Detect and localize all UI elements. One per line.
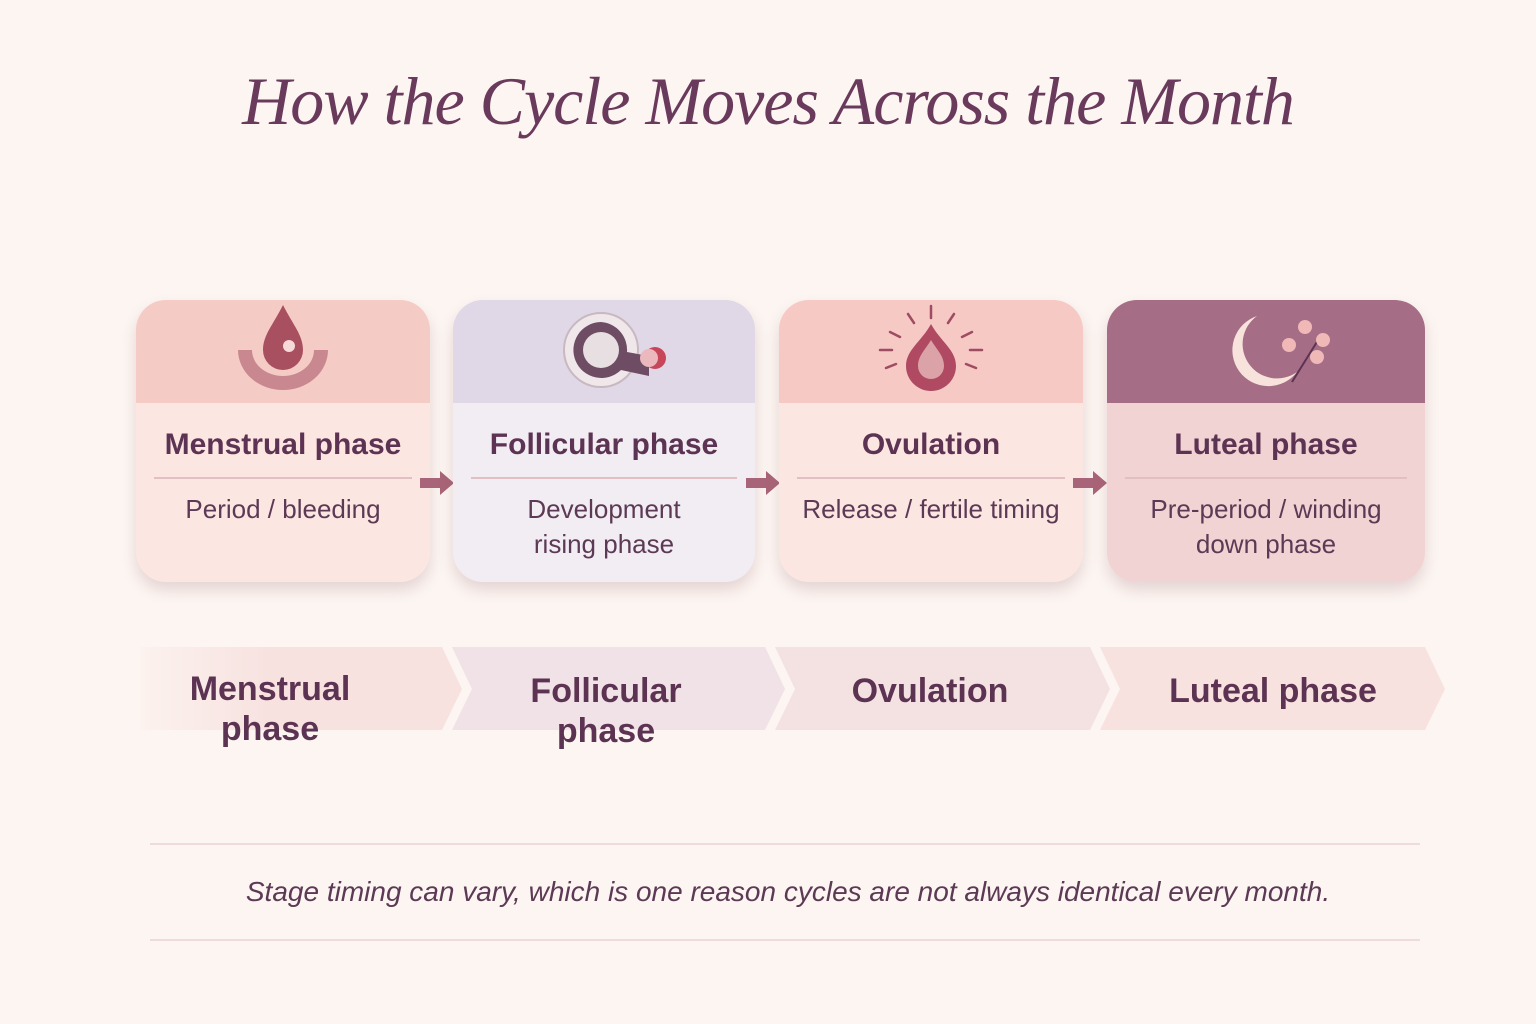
chevron label: menstrual: phase [221, 710, 319, 748]
icon: drop [238, 305, 328, 390]
chevron label: ovulation: Ovulation [852, 672, 1008, 710]
header band [453, 300, 755, 403]
chevron label: menstrual [190, 670, 350, 748]
header band [136, 300, 430, 403]
subtitle: Period / bleeding [185, 494, 381, 524]
icon: moon and blossoms [1232, 316, 1330, 386]
subtitle: rising phase [534, 529, 674, 559]
arrow 1 [420, 471, 453, 495]
arrow 2 [746, 471, 779, 495]
subtitle: Release / fertile timing [802, 494, 1060, 524]
icon: radiant drop [878, 304, 984, 391]
chevron label: follicular [530, 672, 682, 750]
heading: Luteal phase [1174, 428, 1358, 461]
footnote: Stage timing can vary, which is one reason cycles are not always identical every month. [246, 876, 1330, 907]
subtitle: Development [527, 494, 681, 524]
header band [779, 300, 1083, 403]
chevron timeline [181, 647, 1445, 750]
chevron label: menstrual: Menstrual [190, 670, 350, 708]
subtitle: Pre-period / winding [1150, 494, 1382, 524]
chevron label: follicular: Follicular [530, 672, 682, 710]
heading: Follicular phase [490, 428, 718, 461]
chevron label: follicular: phase [557, 712, 655, 750]
panel: luteal [1107, 300, 1425, 582]
panel: menstrual [136, 300, 430, 582]
title: How the Cycle Moves Across the Month [242, 63, 1294, 139]
subtitle [527, 494, 681, 559]
arrow 3 [1073, 471, 1107, 495]
panel: ovulation [779, 300, 1083, 582]
heading: Ovulation [862, 428, 1000, 461]
subtitle: down phase [1196, 529, 1336, 559]
chevron label: luteal: Luteal phase [1169, 672, 1377, 710]
header band [1107, 300, 1425, 403]
icon: follicle [563, 312, 666, 388]
panel: follicular [453, 300, 755, 582]
heading: Menstrual phase [165, 428, 401, 461]
subtitle [1150, 494, 1382, 559]
